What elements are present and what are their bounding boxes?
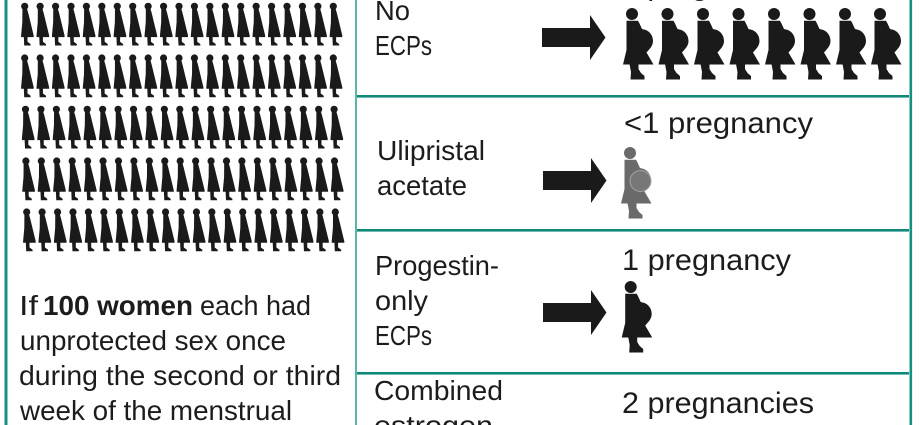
panel: ulipristal acetate [377, 107, 813, 218]
panel: progestin-only ECPs [375, 244, 791, 352]
icons: 8 pregnant women [623, 8, 902, 80]
icon: pregnant woman [622, 281, 652, 352]
label: Ulipristal acetate: Ulipristal [377, 135, 485, 166]
label: Ulipristal acetate: acetate [377, 170, 467, 201]
panel: 100 women [19, 3, 344, 425]
arrow [543, 158, 606, 203]
result: less than 1 pregnancy: <1 pregnancy [624, 107, 813, 140]
text block: explanation: 100 women [43, 290, 193, 321]
label: Progestin-only ECPs [375, 250, 499, 351]
arrow [542, 15, 606, 60]
label: Combined estrogen [374, 375, 503, 425]
label: No ECPs [375, 0, 432, 61]
text block: explanation [19, 290, 341, 425]
label: Progestin-only ECPs: ECPs [375, 320, 432, 351]
label: Combined estrogen: Combined [374, 375, 503, 406]
arrow [543, 290, 606, 335]
label: Ulipristal acetate [377, 135, 485, 201]
text block: explanation: If [19, 290, 38, 321]
label: Progestin-only ECPs: only [375, 285, 428, 316]
icon grid: 100 women silhouettes [21, 3, 344, 251]
label: Progestin-only ECPs: Progestin- [375, 250, 499, 281]
text block: explanation: each had [200, 290, 311, 321]
panel: combined estrogen [374, 375, 814, 425]
text block: explanation: during the second or third [19, 360, 341, 391]
result: 1 pregnancy: 1 pregnancy [622, 244, 791, 277]
icon: partial pregnant woman [621, 147, 652, 218]
panel: no ECPs [375, 0, 902, 80]
text block: explanation: unprotected sex once [20, 325, 286, 356]
label: No ECPs: ECPs [375, 30, 432, 61]
result: 2 pregnancies: 2 pregnancies [622, 387, 814, 420]
